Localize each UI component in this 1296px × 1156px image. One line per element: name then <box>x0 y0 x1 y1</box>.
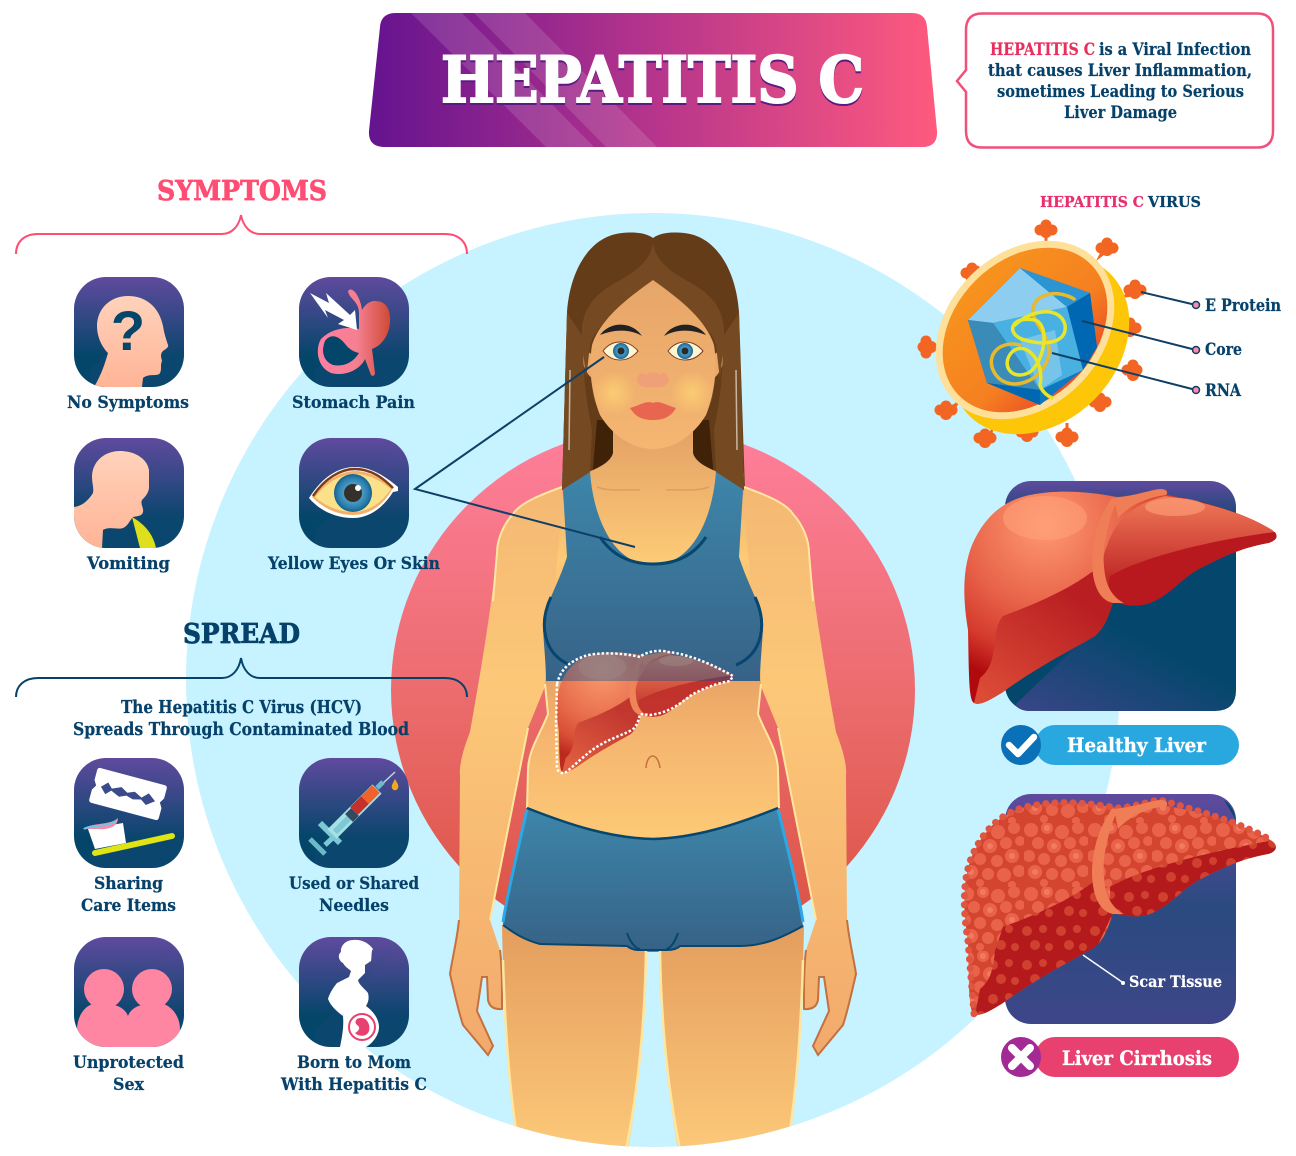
left leg <box>502 925 647 1150</box>
face <box>590 280 716 449</box>
nose <box>637 372 669 387</box>
torso <box>527 430 779 845</box>
cream rim <box>900 205 1150 455</box>
label: born to mom: With Hepatitis C <box>280 1075 427 1095</box>
healthy liver illustration <box>964 489 1277 704</box>
text: spread description: The Hepatitis C Virus (HCV) <box>121 697 362 718</box>
label: Core: Core <box>1205 340 1242 360</box>
left arm <box>450 487 570 1055</box>
blue core <box>968 268 1097 405</box>
virus heading <box>1040 193 1201 211</box>
label: no symptoms: No Symptoms <box>67 393 189 413</box>
hair back <box>562 233 745 490</box>
collarbone <box>597 487 709 490</box>
title text: HEPATITIS C <box>441 43 864 118</box>
icon: vomiting <box>74 438 184 548</box>
heading: spread: SPREAD <box>183 619 300 650</box>
icon: no symptoms: ? <box>111 299 145 362</box>
hair light band <box>582 243 724 380</box>
label: sharing care items <box>81 874 176 916</box>
callout: definition: Liver Damage <box>1064 103 1177 123</box>
icon: stomach pain <box>299 277 409 387</box>
liver dotted outline <box>556 651 733 773</box>
virus pointers <box>1052 292 1200 394</box>
red circle behind figure <box>391 428 915 952</box>
shorts <box>503 808 803 950</box>
label: born to mom: Born to Mom <box>297 1053 411 1073</box>
label: yellow eyes: Yellow Eyes Or Skin <box>267 554 440 574</box>
orange interior <box>910 215 1140 445</box>
tank top <box>543 470 763 681</box>
label: sharing care items: Sharing <box>94 874 163 894</box>
label: used or shared needles: Used or Shared <box>289 874 419 894</box>
RNA strand <box>991 294 1074 398</box>
label: sharing care items: Care Items <box>81 896 176 916</box>
callout: definition <box>957 14 1273 148</box>
callout: definition: HEPATITIS C <box>990 40 1095 60</box>
ears <box>584 352 722 378</box>
brows <box>600 325 706 336</box>
text: spread description <box>73 697 409 740</box>
cirrhotic liver illustration <box>960 796 1280 1021</box>
label: unprotected sex: Unprotected <box>73 1053 184 1073</box>
navel <box>646 756 660 768</box>
icon: born to mom with hepatitis c <box>299 937 409 1047</box>
panel: healthy liver <box>964 481 1277 711</box>
label: unprotected sex: Sex <box>113 1075 145 1095</box>
title banner <box>369 13 937 147</box>
callout: definition: sometimes Leading to Serious <box>997 82 1244 102</box>
virus heading: VIRUS <box>1147 193 1201 211</box>
yellow shell <box>915 220 1165 470</box>
icon: syringe <box>299 758 409 868</box>
label: E Protein: E Protein <box>1205 296 1281 316</box>
badge: healthy liver: Healthy Liver <box>1067 733 1206 757</box>
heading: symptoms: SYMPTOMS <box>157 176 327 207</box>
right arm <box>736 487 856 1055</box>
label: used or shared needles: Needles <box>319 896 389 916</box>
label: vomiting: Vomiting <box>86 554 170 574</box>
bracket: symptoms <box>16 215 467 254</box>
text: spread description: Spreads Through Contaminated Blood <box>73 719 409 740</box>
right leg <box>659 925 804 1150</box>
icon: razor and toothbrush <box>74 758 184 868</box>
badge: healthy liver <box>1001 725 1239 765</box>
virus illustration <box>900 205 1200 470</box>
lips <box>630 402 676 420</box>
background circle <box>186 213 1120 1147</box>
hand outlines <box>450 920 856 1055</box>
eyes <box>603 342 703 360</box>
scar tissue pointer <box>1083 955 1125 985</box>
virus heading: HEPATITIS C <box>1040 193 1144 211</box>
callout: definition: is a Viral Infection <box>1099 40 1251 60</box>
panel: liver cirrhosis <box>960 794 1280 1024</box>
figure: woman <box>450 233 856 1150</box>
pointer lines from eye icon <box>415 357 635 547</box>
spikes <box>918 220 1146 448</box>
badge: liver cirrhosis <box>1001 1037 1239 1077</box>
label: scar tissue: Scar Tissue <box>1129 972 1222 991</box>
badge: liver cirrhosis: Liver Cirrhosis <box>1062 1046 1212 1070</box>
icon: yellow eyes <box>299 438 409 548</box>
label: RNA: RNA <box>1205 381 1242 401</box>
icon: no symptoms <box>74 277 184 387</box>
liver inside body <box>556 651 734 773</box>
callout: definition: that causes Liver Inflammation, <box>988 61 1252 81</box>
label: stomach pain: Stomach Pain <box>292 393 415 413</box>
label: used or shared needles <box>289 874 419 916</box>
label: born to mom <box>280 1053 427 1095</box>
label: unprotected sex <box>73 1053 184 1095</box>
icon: unprotected sex <box>74 937 184 1047</box>
bracket: spread <box>16 658 467 697</box>
